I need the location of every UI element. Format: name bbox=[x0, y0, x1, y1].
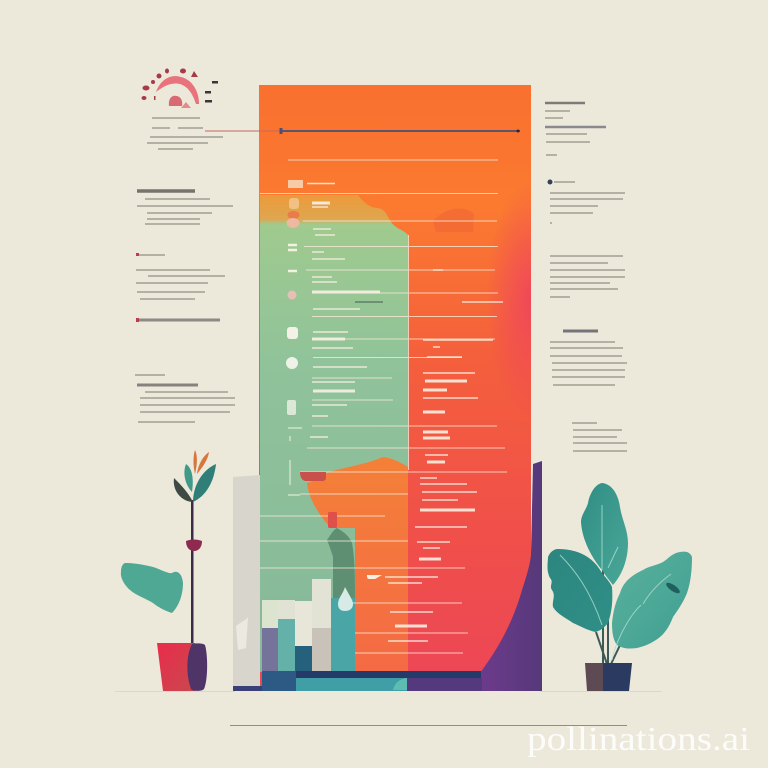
purple base bbox=[407, 678, 482, 691]
icon: square tag bbox=[288, 180, 303, 188]
stem node bbox=[186, 540, 202, 551]
orange lower blob bbox=[307, 457, 408, 672]
teal lower strip bbox=[331, 598, 355, 672]
panel labels: white bar text bbox=[307, 184, 503, 641]
bar chart: skyline blocks bbox=[233, 475, 331, 686]
icon: white blob bbox=[367, 575, 382, 579]
icon: peach rounded bbox=[289, 198, 299, 209]
text block: left 1 bbox=[137, 191, 233, 224]
column 2 bbox=[278, 600, 295, 672]
leaf spot bbox=[665, 581, 681, 595]
teal base drop bbox=[393, 678, 407, 690]
top leaf bbox=[581, 483, 628, 585]
leaf veins bbox=[560, 505, 671, 660]
icon: pink circle bbox=[288, 290, 296, 300]
text block: right 4 bbox=[550, 331, 627, 385]
grey block highlight bbox=[236, 617, 248, 650]
dark navy band bbox=[296, 671, 481, 678]
footer rule bbox=[230, 724, 627, 726]
panel right edge glow bbox=[486, 180, 531, 420]
icon: small marks bbox=[288, 245, 297, 271]
text block: left 3 bbox=[135, 375, 235, 422]
left column labels bbox=[307, 184, 367, 437]
sun dark rays bbox=[205, 81, 218, 102]
plant: left potted plant bbox=[121, 450, 216, 691]
panel divider and guide lines bbox=[260, 160, 507, 653]
icon column bbox=[286, 180, 382, 611]
pot right half bbox=[603, 663, 632, 691]
icon: white jar bbox=[287, 327, 298, 339]
icon: water drop bbox=[338, 587, 353, 611]
panel: tall gradient chart bbox=[259, 85, 531, 691]
icon: red pill bbox=[300, 472, 326, 481]
green region bbox=[260, 195, 408, 672]
sun half disc bbox=[169, 96, 182, 106]
icon: pink oval bbox=[286, 218, 300, 228]
left leaf bbox=[548, 549, 612, 632]
text block: right 5 bbox=[572, 423, 627, 451]
left column bold labels bbox=[312, 203, 380, 391]
ground lines bbox=[115, 690, 662, 692]
column 4 bbox=[312, 579, 331, 672]
dark base strip bbox=[233, 686, 262, 691]
right column bold labels bbox=[395, 381, 475, 626]
right column labels bbox=[385, 270, 503, 641]
sun arc bbox=[156, 76, 199, 104]
center leaf bbox=[184, 464, 193, 492]
text block: sun caption bbox=[147, 118, 223, 149]
text block: right 3 bbox=[550, 256, 625, 297]
pot red body bbox=[157, 643, 195, 691]
grey tall block bbox=[233, 475, 260, 686]
stem bbox=[191, 500, 194, 646]
base bands bbox=[233, 671, 482, 691]
text block: left 2 bbox=[136, 253, 225, 322]
pot purple side bbox=[187, 643, 207, 691]
pot left half bbox=[585, 663, 603, 691]
panel base gradient bbox=[259, 85, 531, 691]
dark green strip bbox=[327, 528, 355, 600]
dark blue base left bbox=[262, 671, 296, 691]
icon: red oval bbox=[288, 211, 300, 219]
icon: sun badge bbox=[142, 68, 218, 108]
right leaf bbox=[612, 552, 692, 649]
column 3 bbox=[295, 601, 312, 672]
icon: white circle bbox=[286, 357, 298, 369]
dark smudge bbox=[355, 301, 383, 303]
icon: small stem bbox=[288, 428, 302, 495]
icon: red tag bbox=[328, 512, 337, 528]
purple corner shape bbox=[480, 461, 542, 691]
stems bbox=[596, 570, 632, 664]
sun rays bbox=[142, 68, 198, 100]
watermark: pollinations.ai bbox=[527, 721, 750, 758]
text block: right 2 bbox=[548, 180, 625, 223]
right leaf bbox=[193, 464, 216, 502]
icon: jar outline bbox=[287, 400, 296, 415]
orange buds bbox=[194, 450, 209, 474]
plant: right potted plant bbox=[548, 483, 692, 691]
dark left leaf bbox=[174, 478, 193, 502]
darker orange blob bbox=[433, 209, 474, 232]
column 1 bbox=[262, 600, 278, 672]
teal base bbox=[296, 678, 407, 691]
side leaf bbox=[121, 563, 183, 613]
header rule with red lead line bbox=[205, 128, 520, 134]
sun triangle bbox=[181, 102, 191, 108]
text block: right 1 bbox=[545, 103, 606, 155]
